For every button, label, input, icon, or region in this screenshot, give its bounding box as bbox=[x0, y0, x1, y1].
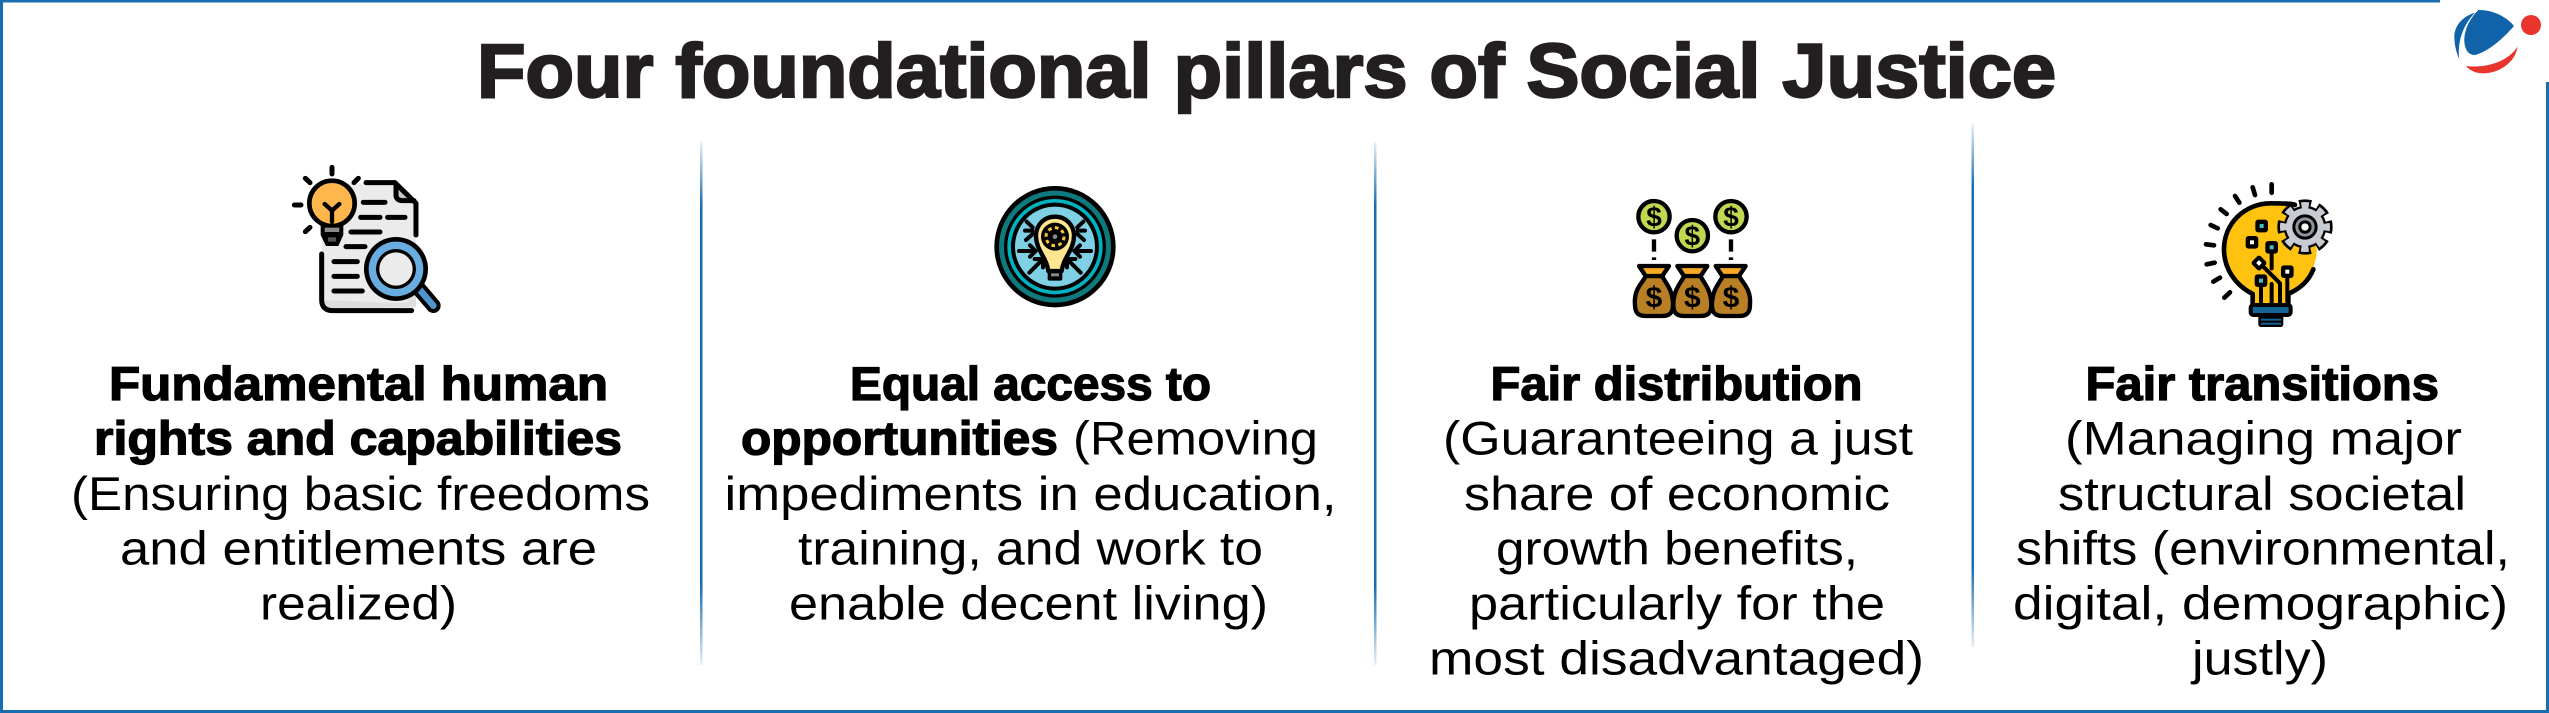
description: structural societal bbox=[2058, 467, 2466, 520]
title: Four foundational pillars of Social Justice bbox=[477, 29, 2056, 114]
heading: Fair transitions bbox=[2086, 357, 2439, 410]
icon: coins above money bags: $ bbox=[1646, 281, 1663, 314]
icon: circuit light bulb with gear bbox=[2206, 184, 2333, 327]
panel: equal access to opportunities bbox=[724, 186, 1336, 629]
description: training, and work to bbox=[798, 522, 1263, 574]
description: enable decent living) bbox=[789, 576, 1268, 630]
description: growth benefits, bbox=[1496, 522, 1858, 574]
heading: Equal access to bbox=[850, 357, 1211, 410]
description: (Managing major bbox=[2065, 412, 2462, 464]
icon: document with light bulb and magnifier bbox=[294, 167, 433, 311]
description bbox=[1429, 412, 1924, 684]
description: impediments in education, bbox=[724, 467, 1336, 520]
icon: coins above money bags: $ bbox=[1723, 202, 1739, 233]
description: justly) bbox=[2190, 632, 2328, 684]
panel: fundamental human rights bbox=[71, 167, 650, 630]
description: and entitlements are bbox=[120, 522, 597, 574]
panel: fair transitions bbox=[2013, 184, 2510, 684]
description: shifts (environmental, bbox=[2016, 522, 2510, 574]
description: particularly for the bbox=[1469, 576, 1885, 630]
description: (Ensuring basic freedoms bbox=[71, 467, 650, 520]
description bbox=[724, 412, 1336, 630]
heading bbox=[94, 357, 622, 464]
panel: fair distribution bbox=[1429, 201, 1924, 685]
icon: coins above money bags bbox=[1635, 201, 1750, 316]
description: most disadvantaged) bbox=[1429, 632, 1924, 684]
heading bbox=[741, 357, 1211, 464]
description: (Guaranteeing a just bbox=[1443, 412, 1913, 464]
description: (Removing bbox=[1073, 412, 1318, 464]
heading: Fair distribution bbox=[1490, 357, 1862, 410]
icon: coins above money bags: $ bbox=[1646, 202, 1662, 233]
description: realized) bbox=[260, 576, 457, 630]
icon: coins above money bags: $ bbox=[1723, 281, 1740, 314]
heading: Fundamental human bbox=[109, 357, 608, 410]
description bbox=[2013, 412, 2510, 684]
icon: coins above money bags: $ bbox=[1684, 281, 1701, 314]
icon: coins above money bags: $ bbox=[1685, 221, 1701, 252]
logo bbox=[2454, 10, 2541, 73]
heading: opportunities bbox=[741, 412, 1058, 464]
description: digital, demographic) bbox=[2013, 576, 2508, 630]
description: share of economic bbox=[1464, 467, 1890, 520]
description bbox=[71, 467, 650, 630]
heading: rights and capabilities bbox=[94, 412, 622, 464]
icon: bulb with gear inside concentric circles bbox=[994, 186, 1116, 307]
